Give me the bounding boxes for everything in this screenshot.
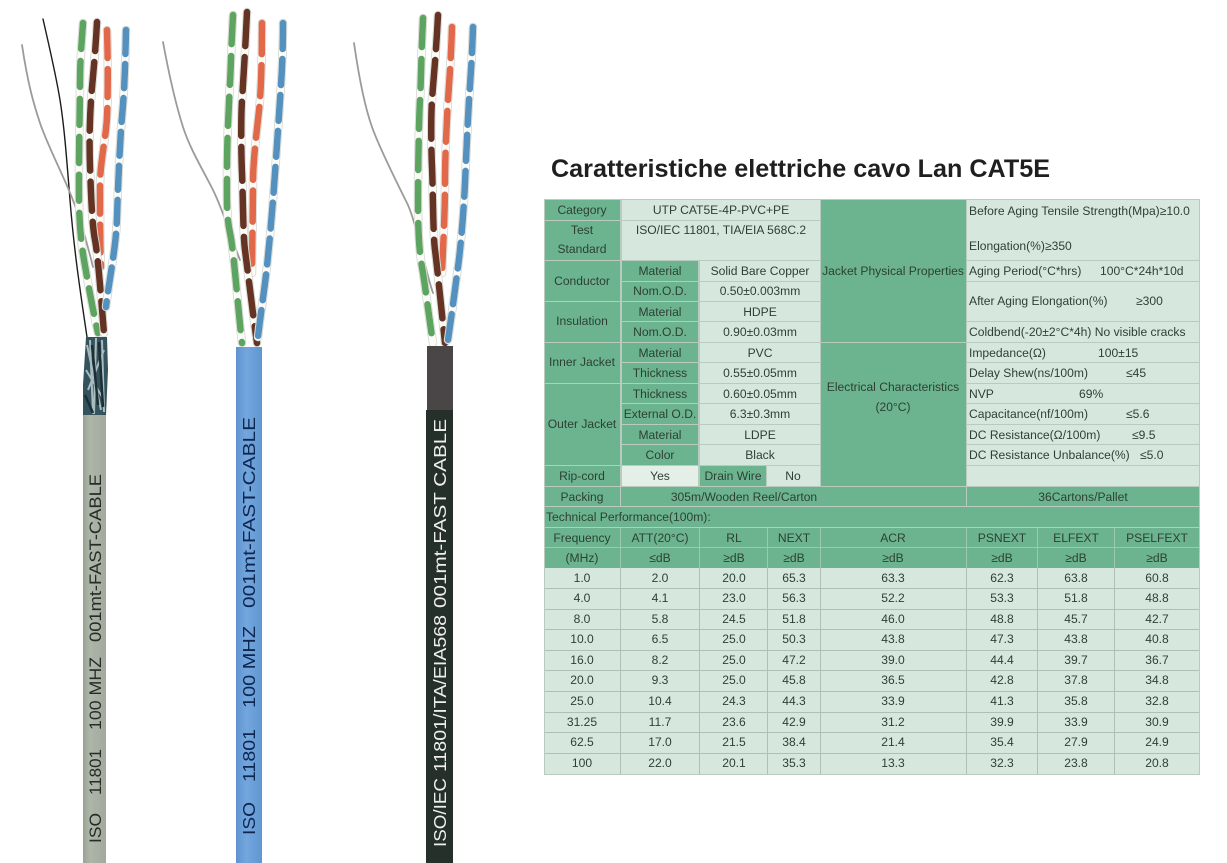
panel: performance data: 43.8	[881, 632, 905, 646]
panel: performance data: 45.8	[782, 673, 806, 687]
panel: performance data: 8.2	[652, 653, 669, 667]
panel: section headings: Electrical Characteristics	[827, 380, 959, 394]
panel: performance column headers: ≥dB	[991, 551, 1013, 565]
panel: performance data: 2.0	[652, 571, 669, 585]
panel: performance data: 44.4	[990, 653, 1014, 667]
panel: performance data: 42.8	[990, 673, 1014, 687]
panel: physical and electrical values: Impedance(Ω)	[969, 346, 1046, 360]
panel: cable construction: 0.90±0.03mm	[723, 325, 797, 339]
panel: performance column headers: ACR	[880, 531, 906, 545]
cable: grey shielded	[22, 19, 126, 863]
cable print: blue: ISO	[239, 802, 259, 835]
panel: cable construction: Material	[638, 346, 682, 360]
pair: brown	[241, 12, 257, 343]
panel: section headings: Jacket Physical Properties	[822, 264, 964, 278]
panel: performance data: 47.2	[782, 653, 806, 667]
panel: performance data: 52.2	[881, 591, 905, 605]
panel: physical and electrical values: 100±15	[1098, 346, 1139, 360]
pair: green	[79, 23, 98, 333]
panel: performance data: 20.8	[1145, 756, 1169, 770]
panel: performance column headers: ≥dB	[1065, 551, 1087, 565]
panel: performance data: 62.3	[990, 571, 1014, 585]
title: Caratteristiche elettriche cavo Lan CAT5E	[551, 155, 1050, 183]
panel: cable construction: Material	[638, 428, 682, 442]
panel: performance data: 6.5	[652, 632, 669, 646]
panel: performance data: 21.4	[881, 735, 905, 749]
panel: performance data: 44.3	[782, 694, 806, 708]
panel: performance data: 36.7	[1145, 653, 1169, 667]
panel: physical and electrical values: 100°C*24h*10d	[1100, 264, 1184, 278]
cable print: grey: 11801	[87, 749, 105, 795]
panel: physical and electrical values: ≤9.5	[1132, 428, 1156, 442]
cable print: blue: 100 MHZ	[239, 626, 259, 708]
pair: orange	[252, 23, 262, 273]
drain wire: grey	[354, 43, 433, 293]
panel: physical and electrical values: Elongation(%)≥350	[969, 239, 1072, 253]
panel: performance data: 20.1	[722, 756, 746, 770]
drain wire: grey	[22, 45, 93, 267]
panel: performance data: 23.6	[722, 715, 746, 729]
pair: blue	[448, 27, 473, 340]
panel: cable construction: Category	[557, 203, 607, 217]
panel: physical and electrical values: Aging Period(°C*hrs)	[969, 264, 1081, 278]
panel: performance data: 9.3	[652, 673, 669, 687]
cable print: blue: 001mt-FAST-CABLE	[239, 417, 259, 608]
cable print: black: ISO/IEC	[430, 778, 450, 847]
pair: blue	[106, 30, 126, 307]
panel: performance data: 62.5	[570, 735, 594, 749]
panel: cable construction	[545, 200, 820, 486]
pair: orange	[100, 30, 108, 267]
panel: physical and electrical values: Before Aging Tensile Strength(Mpa)≥10.0	[969, 204, 1190, 218]
panel: performance data: 25.0	[722, 632, 746, 646]
panel: performance data: 24.5	[722, 612, 746, 626]
panel: performance column headers: ≥dB	[783, 551, 805, 565]
panel: physical and electrical values: ≤45	[1126, 366, 1146, 380]
panel: cable construction: PVC	[748, 346, 773, 360]
panel: cable construction: Conductor	[554, 274, 610, 288]
panel: performance data: 40.8	[1145, 632, 1169, 646]
panel: performance data: 42.7	[1145, 612, 1169, 626]
panel: performance column headers: ≤dB	[649, 551, 671, 565]
jacket: blue	[236, 347, 262, 863]
panel: performance data: 4.1	[652, 591, 669, 605]
panel: performance column headers: ≥dB	[882, 551, 904, 565]
drain wire: grey	[163, 42, 240, 260]
pair: brown	[431, 15, 445, 343]
panel: performance data: 27.9	[1064, 735, 1088, 749]
panel: performance data: 11.7	[649, 715, 672, 729]
panel: performance data: 31.2	[881, 715, 905, 729]
panel: performance data: 35.8	[1064, 694, 1088, 708]
panel: performance data: 37.8	[1064, 673, 1088, 687]
panel: performance data: 56.3	[782, 591, 806, 605]
panel: performance data: 36.5	[881, 673, 905, 687]
panel: performance column headers: PSNEXT	[978, 531, 1027, 545]
panel: performance data: 10.0	[570, 632, 594, 646]
panel: cable construction: Test	[571, 223, 594, 237]
panel: performance data: 33.9	[1064, 715, 1088, 729]
panel: performance data: 60.8	[1145, 571, 1169, 585]
panel: performance data: 46.0	[881, 612, 905, 626]
panel: performance data: 41.3	[990, 694, 1014, 708]
panel: performance data: 22.0	[648, 756, 672, 770]
panel: performance data: 45.7	[1064, 612, 1088, 626]
panel: performance data: 8.0	[574, 612, 591, 626]
panel: performance data: 30.9	[1145, 715, 1169, 729]
cable print: blue	[239, 417, 259, 835]
panel: cable construction: Nom.O.D.	[633, 325, 687, 339]
panel: performance column headers: ATT(20°C)	[631, 531, 689, 545]
panel: performance column headers: RL	[726, 531, 742, 545]
panel: cable construction: No	[785, 469, 801, 483]
panel: cable construction: Color	[646, 448, 674, 462]
panel: cable construction: Drain Wire	[704, 469, 762, 483]
panel: cable construction: ISO/IEC 11801, TIA/EIA 568C.2	[636, 223, 806, 237]
panel: section headings: (20°C)	[875, 400, 911, 414]
panel: performance column headers: (MHz)	[566, 551, 598, 565]
panel: performance data: 100	[572, 756, 592, 770]
panel: physical and electrical values: NVP	[969, 387, 994, 401]
panel: packing: Packing	[560, 490, 604, 504]
pair: green	[418, 18, 433, 343]
panel: cable construction: 6.3±0.3mm	[730, 407, 790, 421]
panel: performance data: 13.3	[881, 756, 905, 770]
panel: performance data: 23.8	[1064, 756, 1088, 770]
panel: performance data: 25.0	[570, 694, 594, 708]
panel: physical and electrical values: Delay Shew(ns/100m)	[969, 366, 1088, 380]
panel: cable construction: 0.60±0.05mm	[723, 387, 797, 401]
panel: cable construction: Yes	[650, 469, 670, 483]
panel: cable construction: LDPE	[744, 428, 776, 442]
panel: performance column headers: Frequency	[553, 531, 612, 545]
panel: physical and electrical values: Coldbend(-20±2°C*4h) No visible cracks	[969, 325, 1186, 339]
pair: brown	[90, 22, 104, 333]
panel: cable construction: HDPE	[743, 305, 777, 319]
drain wire: black	[43, 19, 87, 337]
cable print: grey: 001mt-FAST-CABLE	[87, 474, 105, 642]
panel: performance data: 34.8	[1145, 673, 1169, 687]
panel: performance data: 39.7	[1064, 653, 1088, 667]
panel: performance data: 38.4	[782, 735, 806, 749]
panel: cable construction: Solid Bare Copper	[711, 264, 809, 278]
panel: cable construction: Rip-cord	[559, 469, 605, 483]
panel: performance data: 39.0	[881, 653, 905, 667]
panel: physical and electrical values: After Aging Elongation(%)	[969, 294, 1108, 308]
panel: cable construction: Insulation	[556, 314, 608, 328]
panel: cable construction: 0.50±0.003mm	[720, 284, 800, 298]
panel: performance column headers: PSELFEXT	[1126, 531, 1189, 545]
cable print: black	[430, 419, 450, 847]
panel: cable construction: Thickness	[633, 387, 687, 401]
panel: performance data: 17.0	[648, 735, 672, 749]
panel: performance column headers: ≥dB	[723, 551, 745, 565]
panel: performance data: 35.3	[782, 756, 806, 770]
cable print: black: 001mt-FAST CABLE	[430, 419, 450, 608]
panel: packing: 305m/Wooden Reel/Carton	[671, 490, 817, 504]
panel: cable construction: Black	[745, 448, 776, 462]
wrap: dark tape	[427, 346, 453, 412]
panel: performance data: 16.0	[570, 653, 594, 667]
panel: performance data: 48.8	[1145, 591, 1169, 605]
panel: performance column headers: ≥dB	[1146, 551, 1168, 565]
foil shield	[83, 337, 108, 415]
panel: performance data: 65.3	[782, 571, 806, 585]
pair: orange	[442, 27, 452, 273]
cable print: black: 11801/ITA/EIA568	[430, 615, 450, 772]
panel: performance data: 25.0	[722, 653, 746, 667]
panel: cable construction: External O.D.	[624, 407, 696, 421]
cable print: grey: ISO	[87, 813, 105, 843]
panel: performance data: 51.8	[1064, 591, 1088, 605]
panel: cable construction: Nom.O.D.	[633, 284, 687, 298]
cable print: grey	[87, 474, 105, 843]
specifications table	[544, 199, 1200, 775]
panel: performance data: 24.9	[1145, 735, 1169, 749]
panel: packing	[545, 487, 1199, 506]
panel: cable construction: UTP CAT5E-4P-PVC+PE	[653, 203, 789, 217]
panel: physical and electrical values	[967, 200, 1199, 486]
panel: physical and electrical values: 69%	[1079, 387, 1103, 401]
panel: cable construction: Outer Jacket	[548, 417, 617, 431]
panel: physical and electrical values: DC Resistance Unbalance(%)	[969, 448, 1130, 462]
panel: performance data: 20.0	[722, 571, 746, 585]
cable print: blue: 11801	[239, 729, 259, 782]
panel: performance data: 35.4	[990, 735, 1014, 749]
pair: green	[227, 15, 242, 343]
cable: black	[354, 15, 473, 863]
panel: cable construction: Material	[638, 305, 682, 319]
pair: blue	[258, 23, 283, 337]
panel: cable construction: Thickness	[633, 366, 687, 380]
panel: performance data: 50.3	[782, 632, 806, 646]
panel: performance data: 1.0	[574, 571, 591, 585]
panel: performance data: 20.0	[570, 673, 594, 687]
heading: technical performance: Technical Performance(100m):	[546, 510, 711, 524]
jacket: grey	[83, 415, 106, 863]
panel: physical and electrical values: ≤5.0	[1140, 448, 1164, 462]
panel: physical and electrical values: DC Resistance(Ω/100m)	[969, 428, 1100, 442]
panel: physical and electrical values: Capacitance(nf/100m)	[969, 407, 1088, 421]
panel: cable construction: Material	[638, 264, 682, 278]
panel: performance data: 33.9	[881, 694, 905, 708]
panel: performance data: 10.4	[648, 694, 672, 708]
panel: performance data: 32.8	[1145, 694, 1169, 708]
panel: performance data: 23.0	[722, 591, 746, 605]
panel: performance data: 39.9	[990, 715, 1014, 729]
panel: performance data: 63.8	[1064, 571, 1088, 585]
panel: performance data: 51.8	[782, 612, 806, 626]
panel: performance data: 47.3	[990, 632, 1014, 646]
panel: cable construction: 0.55±0.05mm	[723, 366, 797, 380]
panel: performance data: 53.3	[990, 591, 1014, 605]
panel: performance data: 42.9	[782, 715, 806, 729]
panel: performance data	[545, 568, 1199, 774]
heading: technical performance	[545, 507, 1199, 527]
panel: performance data: 48.8	[990, 612, 1014, 626]
panel: cable construction: Inner Jacket	[549, 355, 616, 369]
panel: performance data: 25.0	[722, 673, 746, 687]
panel: performance data: 24.3	[722, 694, 746, 708]
panel: performance data: 4.0	[574, 591, 591, 605]
panel: packing: 36Cartons/Pallet	[1038, 490, 1128, 504]
panel: cable construction: Standard	[557, 242, 607, 256]
cable print: grey: 100 MHZ	[87, 657, 105, 730]
panel: performance data: 43.8	[1064, 632, 1088, 646]
panel: physical and electrical values: ≥300	[1136, 294, 1163, 308]
panel: physical and electrical values: ≤5.6	[1126, 407, 1150, 421]
panel: performance data: 32.3	[990, 756, 1014, 770]
panel: performance column headers	[545, 528, 1199, 568]
panel: performance data: 63.3	[881, 571, 905, 585]
jacket: black	[426, 410, 453, 863]
panel: performance column headers: ELFEXT	[1053, 531, 1099, 545]
panel: section headings	[821, 200, 966, 486]
panel: performance data: 31.25	[567, 715, 597, 729]
panel: performance data: 5.8	[652, 612, 669, 626]
panel: performance column headers: NEXT	[778, 531, 811, 545]
panel: performance data: 21.5	[722, 735, 746, 749]
cable: blue	[163, 12, 283, 863]
